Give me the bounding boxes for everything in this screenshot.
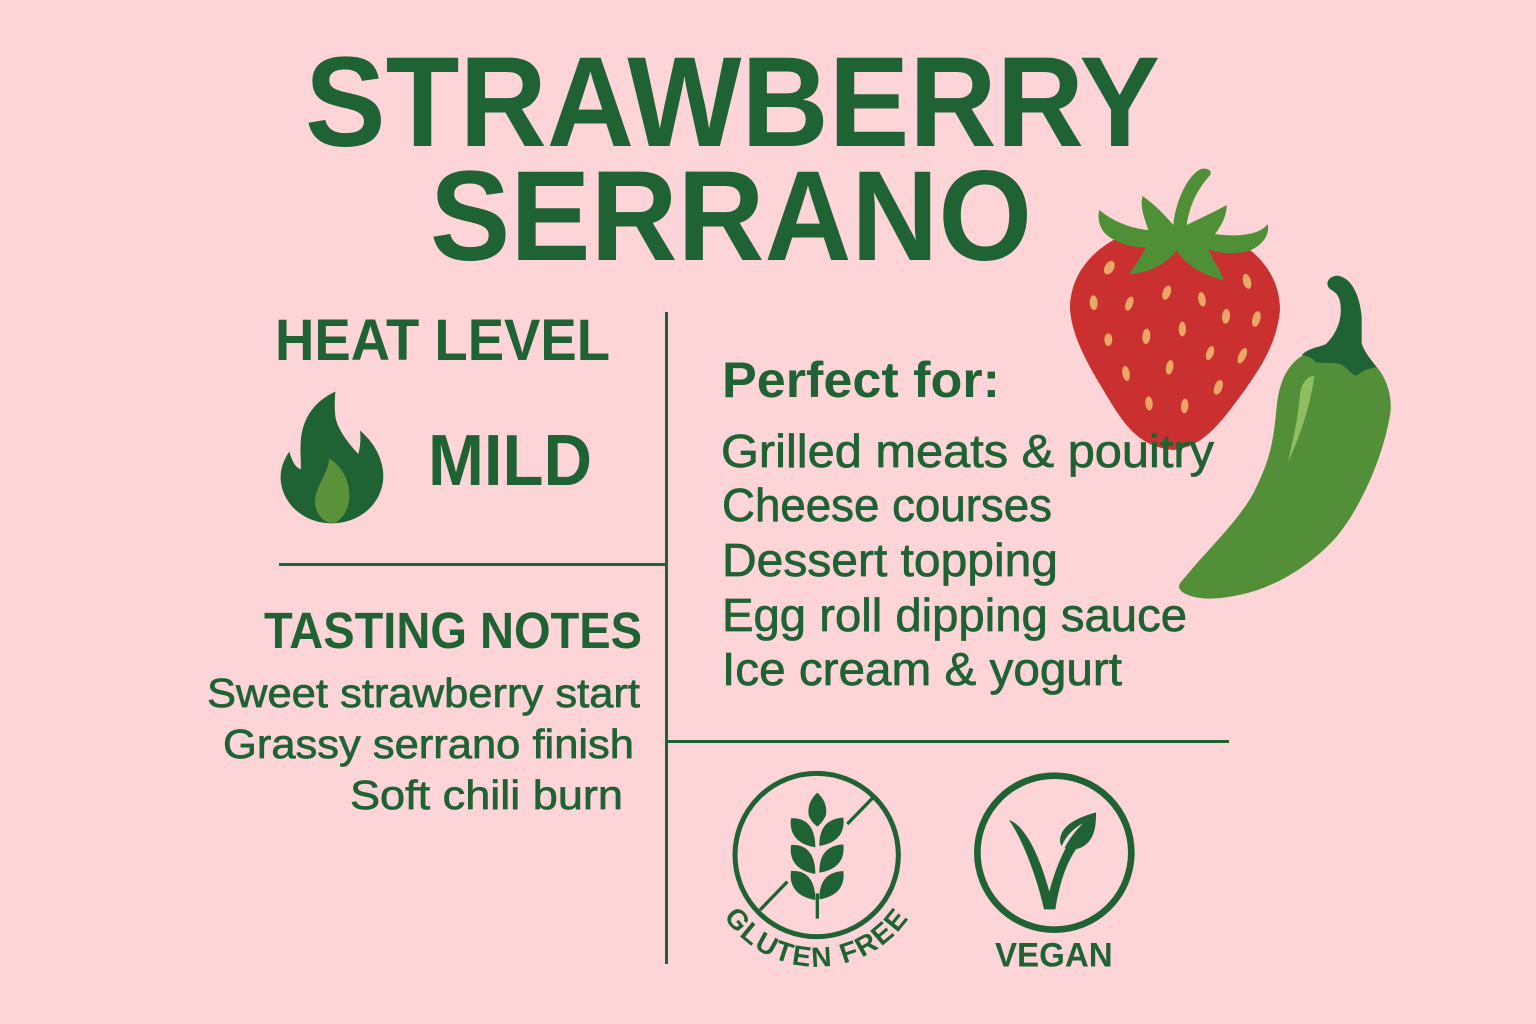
tasting notes list xyxy=(207,670,641,818)
title: SERRANO xyxy=(430,145,1032,288)
icon: strawberry xyxy=(1070,169,1280,450)
heat rating: MILD xyxy=(428,421,592,501)
heading: perfect for: Perfect for: xyxy=(722,352,1000,408)
title xyxy=(305,31,1160,288)
pairings list xyxy=(721,425,1214,695)
tasting notes list: Sweet strawberry start xyxy=(207,670,641,716)
divider: pairings and badges xyxy=(667,740,1229,743)
pairings list: Egg roll dipping sauce xyxy=(722,589,1187,641)
heading: heat level: HEAT LEVEL xyxy=(275,308,610,373)
panel: heat level xyxy=(275,308,610,523)
divider: heat level and tasting notes xyxy=(279,563,666,566)
badge: gluten free: GLUTEN FREE xyxy=(727,908,908,967)
heading: tasting notes: TASTING NOTES xyxy=(264,602,642,659)
panel: tasting notes xyxy=(207,602,642,818)
badge: vegan: VEGAN xyxy=(995,937,1113,975)
panel: perfect for xyxy=(721,352,1214,695)
tasting notes list: Soft chili burn xyxy=(350,772,623,818)
badge: vegan xyxy=(977,776,1131,975)
badge: gluten free xyxy=(727,770,908,967)
pairings list: Dessert topping xyxy=(722,534,1058,586)
pairings list: Grilled meats & pouitry xyxy=(721,425,1214,477)
icon: serrano pepper xyxy=(1179,276,1391,599)
icon: flame xyxy=(281,392,383,523)
pairings list: Cheese courses xyxy=(722,479,1052,531)
tasting notes list: Grassy serrano finish xyxy=(223,721,634,767)
vertical divider xyxy=(665,312,668,964)
pairings list: Ice cream & yogurt xyxy=(722,643,1122,695)
title: STRAWBERRY xyxy=(305,31,1160,174)
